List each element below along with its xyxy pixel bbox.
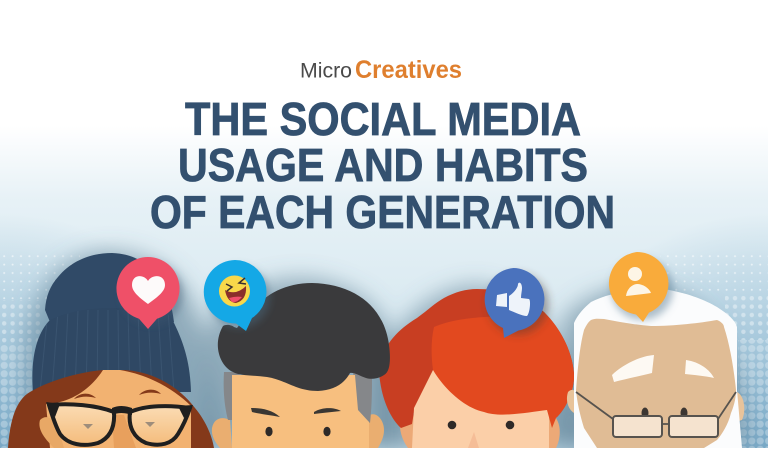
eyes	[642, 408, 648, 415]
speech bubble: heart	[116, 257, 183, 329]
back hair	[379, 289, 574, 428]
hair	[8, 370, 214, 448]
title: OF EACH GENERATION	[150, 186, 615, 238]
face	[46, 370, 191, 448]
eyebrows	[251, 408, 280, 417]
beanie ribs	[40, 310, 174, 392]
face	[576, 319, 736, 448]
bottom white strip	[0, 448, 768, 454]
speech bubble: laughing emoji	[204, 260, 270, 331]
ears	[566, 390, 574, 413]
eyebrows	[74, 394, 96, 399]
logo: Creatives	[355, 56, 462, 84]
glasses	[46, 402, 193, 445]
nose	[112, 415, 136, 448]
front hair	[432, 312, 574, 428]
glasses	[576, 392, 736, 437]
logo	[300, 56, 462, 84]
title	[150, 93, 615, 238]
face	[232, 375, 369, 448]
eyebrows	[612, 355, 654, 382]
character shadows	[24, 250, 748, 448]
speech bubble: thumbs up	[485, 268, 549, 338]
hair	[218, 283, 390, 391]
ear left	[39, 417, 64, 448]
beanie fold	[32, 320, 191, 392]
eyes	[448, 421, 456, 429]
logo: Micro	[300, 60, 352, 82]
nose	[468, 432, 479, 448]
title: USAGE AND HABITS	[178, 139, 588, 191]
ears	[400, 415, 414, 448]
white hair	[574, 290, 742, 448]
title: THE SOCIAL MEDIA	[185, 93, 581, 145]
character: girl with beanie	[8, 253, 214, 448]
character: red-haired person	[379, 289, 574, 448]
face	[412, 368, 549, 448]
sideburns	[224, 372, 240, 420]
halftone dots	[0, 250, 768, 448]
ears	[212, 418, 232, 448]
beanie top	[45, 253, 174, 322]
speech bubble: user profile	[609, 252, 673, 322]
eyes	[265, 427, 273, 436]
character: older man	[567, 290, 744, 448]
character: boy with dark hair	[212, 283, 390, 448]
